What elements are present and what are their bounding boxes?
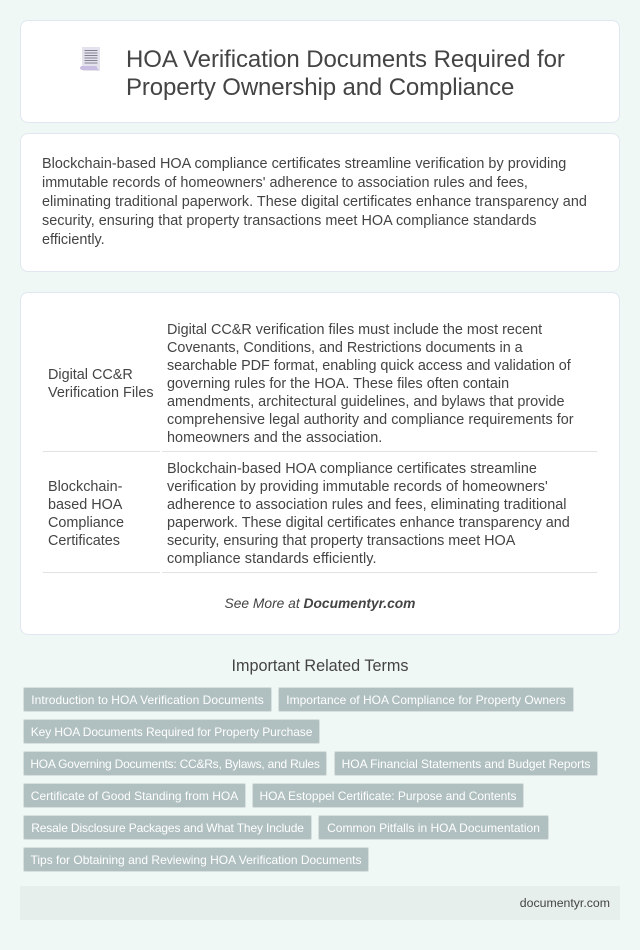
title xyxy=(126,46,565,101)
chip xyxy=(334,751,598,776)
chip xyxy=(23,815,312,840)
chip: Common Pitfalls in HOA Documentation xyxy=(327,821,540,835)
chip: Introduction to HOA Verification Documents xyxy=(31,693,264,707)
chip: Tips for Obtaining and Reviewing HOA Verification Documents xyxy=(30,853,362,867)
row text: paperwork. These digital certificates enhance transparency and xyxy=(167,515,570,531)
row label: based HOA xyxy=(48,497,122,513)
row: Blockchain-based HOA Compliance Certificates xyxy=(48,461,570,567)
row label: Certificates xyxy=(48,533,120,549)
chip xyxy=(23,847,369,872)
chip xyxy=(23,719,320,744)
chip: Key HOA Documents Required for Property Purchase xyxy=(31,725,312,739)
row text xyxy=(167,322,574,446)
chip: Importance of HOA Compliance for Property Owners xyxy=(286,693,566,707)
chip: HOA Financial Statements and Budget Reports xyxy=(342,757,590,771)
row text: comprehensive legal authority and compliance requirements for xyxy=(167,412,574,428)
row text: adherence to association rules and fees, eliminating traditional xyxy=(167,497,567,513)
row label: Compliance xyxy=(48,515,124,531)
row text: amendments, architectural guidelines, and bylaws that provide xyxy=(167,394,565,410)
chip: HOA Estoppel Certificate: Purpose and Contents xyxy=(260,789,516,803)
row label xyxy=(48,367,154,401)
summary text: eliminating traditional paperwork. These digital certificates enhance transparency and xyxy=(42,194,587,210)
row label: Blockchain- xyxy=(48,479,122,495)
row text: verification by providing immutable records of homeowners' xyxy=(167,479,548,495)
row label: Digital CC&R xyxy=(48,367,133,383)
footer bar xyxy=(20,886,620,920)
row text xyxy=(167,461,570,567)
row text: governing rules for the HOA. These files often contain xyxy=(167,376,509,392)
row: Digital CC&R Verification Files xyxy=(48,322,574,446)
row text: security, ensuring that property transactions meet HOA xyxy=(167,533,515,549)
summary text: security, ensuring that property transactions meet HOA compliance standards xyxy=(42,213,536,229)
row label xyxy=(48,479,124,549)
row text: compliance standards efficiently. xyxy=(167,551,377,567)
summary text xyxy=(42,156,587,248)
chip xyxy=(252,783,524,808)
chip xyxy=(23,751,327,776)
title: Property Ownership and Compliance xyxy=(126,74,514,101)
row text: Digital CC&R verification files must include the most recent xyxy=(167,322,542,338)
chip xyxy=(23,687,272,712)
see more link: See More at Documentyr.com xyxy=(225,596,415,611)
summary card xyxy=(20,133,620,272)
chip: Certificate of Good Standing from HOA xyxy=(31,789,238,803)
summary text: Blockchain-based HOA compliance certificates streamline verification by providing xyxy=(42,156,566,172)
footer domain: documentyr.com xyxy=(520,896,610,910)
chip xyxy=(318,815,549,840)
title: HOA Verification Documents Required for xyxy=(126,46,565,73)
chip: Resale Disclosure Packages and What They Include xyxy=(31,821,304,835)
row label: Verification Files xyxy=(48,385,154,401)
related terms heading: Important Related Terms xyxy=(232,657,408,675)
row text: searchable PDF format, enabling quick access and validation of xyxy=(167,358,571,374)
related terms chips xyxy=(23,687,598,872)
header card xyxy=(20,20,620,123)
row text: homeowners and the association. xyxy=(167,430,382,446)
row text: Blockchain-based HOA compliance certificates streamline xyxy=(167,461,537,477)
row text: Covenants, Conditions, and Restrictions documents in a xyxy=(167,340,523,356)
chip xyxy=(23,783,246,808)
chip xyxy=(278,687,574,712)
details card xyxy=(20,292,620,635)
summary text: efficiently. xyxy=(42,232,105,248)
summary text: immutable records of homeowners' adherence to association rules and fees, xyxy=(42,175,528,191)
icon: document scroll xyxy=(80,47,100,71)
chip: HOA Governing Documents: CC&Rs, Bylaws, and Rules xyxy=(30,757,320,771)
